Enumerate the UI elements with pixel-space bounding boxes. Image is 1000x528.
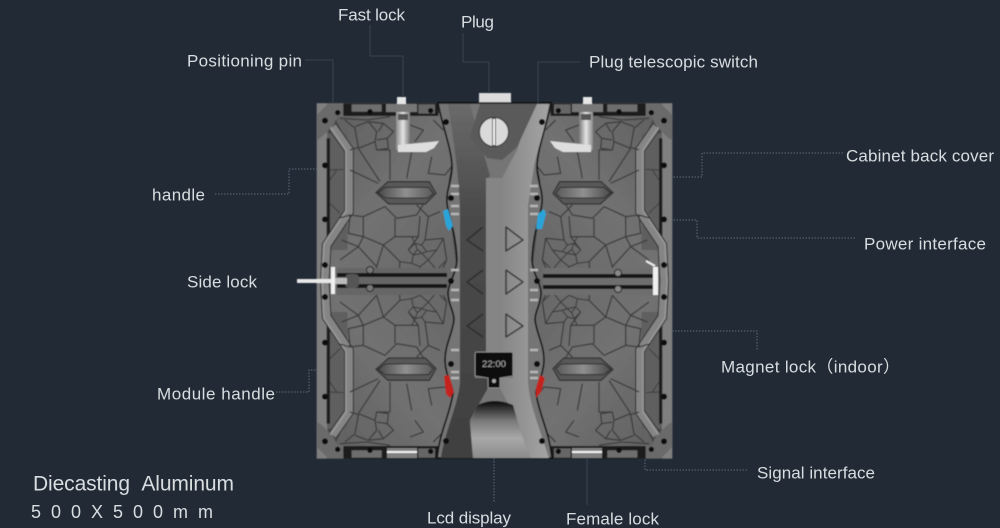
label: signal interface: Signal interface (757, 464, 875, 482)
label: magnet lock: Magnet lock（indoor） (721, 358, 900, 376)
label: positioning pin: Positioning pin (187, 52, 302, 70)
gusset (470, 104, 537, 160)
left dark strip (441, 104, 490, 458)
side lock bars right (543, 268, 656, 295)
lcd display: 22:00 (482, 359, 506, 369)
side lock right (646, 261, 658, 295)
centre strip (486, 178, 502, 353)
female lock latches (387, 448, 602, 458)
cabinet panel (297, 93, 672, 459)
plug telescopic switch circle (480, 118, 508, 146)
quadrant: bottom right (531, 280, 672, 459)
label: side lock: Side lock (187, 272, 258, 292)
leader lines (215, 25, 855, 505)
label: material: Diecasting Aluminum (33, 472, 234, 496)
fast lock left (386, 97, 439, 152)
rib nubs (451, 186, 538, 378)
label: lcd display: Lcd display (427, 508, 512, 528)
blue clips (443, 209, 546, 231)
arrows right (506, 227, 523, 337)
plug (479, 93, 511, 105)
hourglass recess (470, 401, 530, 458)
red clips (444, 375, 545, 398)
panel base (317, 103, 672, 458)
central spine (437, 103, 552, 458)
label: dimensions: 500X500mm (31, 502, 213, 522)
label: power interface: Power interface (864, 234, 986, 254)
right light strip (500, 104, 549, 458)
side lock bars left (337, 266, 447, 295)
quadrant: top right (531, 103, 672, 282)
label: handle: handle (152, 186, 205, 204)
arrows left (467, 227, 483, 337)
label: female lock: Female lock (566, 510, 660, 528)
label: module handle: Module handle (157, 384, 275, 404)
side lock left (297, 267, 347, 294)
quadrant: top left (317, 103, 458, 282)
spine holes (443, 119, 545, 444)
label: plug: Plug (461, 12, 494, 32)
label: cabinet back cover: Cabinet back cover (846, 146, 994, 166)
label: plug telescopic switch: Plug telescopic switch (589, 52, 758, 72)
lcd display (475, 352, 513, 388)
fast lock right (550, 97, 603, 152)
label: fast lock: Fast lock (338, 6, 406, 24)
quadrant: bottom left (317, 280, 458, 459)
